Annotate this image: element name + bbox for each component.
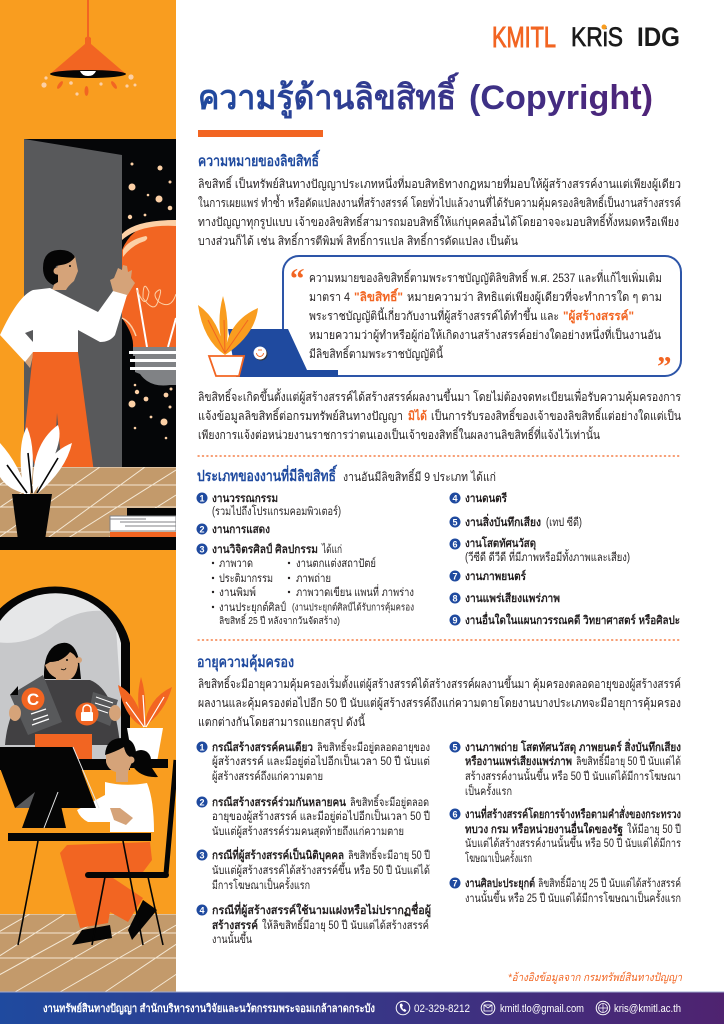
list: protection terms, left column: งานนั้นขึ้น — [212, 931, 252, 946]
icon: hanging lamp — [41, 0, 136, 96]
list: protection terms, left column: ผู้สร้างสรรค์ และมีอยู่ต่อไปอีกเป็นเวลา 50 ปี นับแต่ — [212, 753, 430, 768]
list: types of copyrighted work, left column: งานพิมพ์ — [219, 585, 256, 599]
panel: left illustration column — [0, 0, 190, 992]
list: protection terms, left column: กรณีที่ผู้สร้างสรรค์เป็นนิติบุคคล — [212, 846, 344, 863]
heading: meaning of copyright: ความหมายของลิขสิทธิ์ — [198, 149, 321, 170]
document with lock badge — [76, 692, 121, 726]
list: types of copyrighted work, right column: งานโสตทัศนวัสดุ — [465, 535, 536, 551]
quote text: "ผู้สร้างสรรค์" — [563, 309, 634, 324]
quote text — [309, 269, 662, 361]
list: types of copyrighted work, right column: 7 — [452, 572, 458, 582]
list: protection terms, right column: 6 — [452, 810, 458, 820]
list: protection terms, left column: มีการโฆษณาเป็นครั้งแรก — [212, 877, 310, 892]
list: types of copyrighted work, right column: (เทป ซีดี) — [546, 516, 582, 529]
list: protection terms, left column — [196, 738, 431, 946]
list: protection terms, right column: ทบวง กรม หรือหน่วยงานอื่นใดของรัฐ — [465, 820, 624, 837]
text block: term of protection intro — [198, 675, 681, 730]
list: protection terms, right column: 7 — [452, 878, 458, 888]
monitor — [0, 747, 99, 828]
illustration: laptop and plant — [198, 296, 338, 377]
chair — [88, 760, 176, 945]
list: types of copyrighted work, left column: (รวมไปถึงโปรแกรมคอมพิวเตอร์) — [212, 504, 341, 518]
list: types of copyrighted work, right column: 8 — [452, 594, 458, 604]
list: protection terms, left column: ลิขสิทธิ์จะมีอยู่ตลอดอายุของ — [317, 738, 430, 754]
logos: IDG — [637, 22, 680, 52]
quote text: ความหมายของลิขสิทธิ์ตามพระราชบัญญัติลิขสิทธิ์ พ.ศ. 2537 และที่แก้ไขเพิ่มเติม — [309, 269, 662, 285]
list: types of copyrighted work, left column: งานการแสดง — [212, 524, 270, 536]
list: protection terms, right column: งานศิลปะประยุกต์ — [465, 876, 535, 891]
list: types of copyrighted work, left column: 1 — [199, 494, 205, 504]
heading: types of work: งานอันมีลิขสิทธิ์มี 9 ประเภท ได้แก่ — [343, 468, 496, 484]
list: protection terms, right column — [450, 738, 681, 905]
list: types of copyrighted work, left column: ประติมากรรม — [219, 572, 273, 585]
list: types of copyrighted work, left column: 3 — [199, 544, 205, 554]
text block: registration note: เพียงการแจ้งต่อหน่วยงานราชการว่าตนเองเป็นเจ้าของสิทธิ์ในผลงานลิขสิทธิ์ที่แจ้งไว้เท่านั้น — [198, 426, 600, 442]
seated woman — [60, 738, 158, 945]
footer bar: kris@kmitl.ac.th — [614, 1003, 681, 1015]
quote text: หมายความว่า สิทธิแต่เพียงผู้เดียวที่จะทำการใด ๆ ตาม — [407, 288, 662, 305]
desk — [8, 833, 151, 945]
list: protection terms, left column: นับแต่ผู้สร้างสรรค์ร่วมคนสุดท้ายถึงแก่ความตาย — [212, 824, 404, 838]
text block: definition — [198, 175, 681, 248]
document with copyright badge: C — [27, 690, 39, 709]
logos: KRiS — [571, 22, 623, 52]
list: protection terms, left column: ให้ลิขสิทธิ์มีอายุ 50 ปี นับแต่ได้สร้างสรรค์ — [262, 916, 429, 932]
panel: legal definition quote box — [283, 256, 681, 383]
list: protection terms, left column: นับแต่ผู้สร้างสรรค์ได้สร้างสรรค์ขึ้น หรือ 50 ปี นับแต่ได้ — [212, 862, 430, 877]
list: types of copyrighted work, right column: 9 — [452, 616, 458, 626]
list: protection terms, left column: กรณีสร้างสรรค์ร่วมกันหลายคน — [212, 795, 346, 809]
white plant — [0, 425, 72, 494]
list: types of copyrighted work, left column: ภาพถ่าย — [296, 573, 331, 585]
list: protection terms, left column: 1 — [199, 742, 205, 752]
illustration: arch window with woman holding documents — [0, 587, 130, 770]
man — [0, 250, 135, 467]
illustration: floor with books and white plant — [0, 425, 176, 550]
list: protection terms, right column: หรืองานแพร่เสียงแพร่ภาพ — [465, 755, 572, 768]
text block: definition: บางส่วนก็ได้ เช่น สิทธิ์การตีพิมพ์ สิทธิ์การแปล สิทธิ์การดัดแปลง เป็นต้น — [198, 232, 518, 248]
list: types of copyrighted work, right column: งานอื่นใดในแผนกวรรณคดี วิทยาศาสตร์ หรือศิลปะ — [465, 611, 680, 627]
list: types of copyrighted work, left column: งานวิจิตรศิลป์ ศิลปกรรม — [212, 542, 318, 556]
list: types of copyrighted work, left column: ได้แก่ — [321, 543, 342, 556]
quote text: มาตรา 4 — [309, 290, 350, 304]
footnote: *อ้างอิงข้อมูลจาก กรมทรัพย์สินทางปัญญา — [508, 971, 683, 984]
quote text: มีลิขสิทธิ์ตามพระราชบัญญัตินี้ — [309, 345, 443, 361]
heading: types of work — [197, 464, 496, 485]
list: types of copyrighted work, left column: ภาพวาดเขียน แพนที่ ภาพร่าง — [296, 584, 414, 599]
heading: term of protection: อายุความคุ้มครอง — [197, 654, 294, 672]
text block: registration note: เป็นการรับรองสิทธิ์ของเจ้าของลิขสิทธิ์แต่อย่างใดแต่เป็น — [431, 407, 681, 423]
list: types of copyrighted work, right column: (วีซีดี ดีวีดี ที่มีภาพหรือมีทั้งภาพและเสียง) — [465, 549, 630, 564]
list: types of copyrighted work, left column: งานตกแต่งสถาปัตย์ — [296, 556, 376, 570]
list: types of copyrighted work, right column: 4 — [452, 494, 458, 504]
list: types of copyrighted work, left column: ลิขสิทธิ์ 25 ปี หลังจากวันจัดสร้าง) — [219, 613, 340, 627]
title underline bar — [198, 130, 323, 137]
text block: registration note: แจ้งข้อมูลลิขสิทธิ์ต่อกรมทรัพย์สินทางปัญญา — [198, 407, 403, 424]
text block: registration note: มิได้ — [408, 408, 427, 423]
shelf — [78, 759, 168, 768]
icon: opening quote: “ — [290, 263, 304, 295]
list: protection terms, left column: สร้างสรรค์ — [212, 918, 258, 932]
icon: phone — [396, 1001, 410, 1015]
list: protection terms, left column: 3 — [199, 850, 205, 860]
footer bar: 02-329-8212 — [414, 1003, 470, 1015]
list: types of copyrighted work, right column — [450, 492, 680, 627]
list: protection terms, right column: ให้มีอายุ 50 ปี — [627, 823, 681, 836]
list: types of copyrighted work, left column: งานประยุกต์ศิลป์ — [219, 600, 286, 614]
list: protection terms, left column: กรณีสร้างสรรค์คนเดียว — [212, 740, 313, 754]
quote text: พระราชบัญญัตินี้เกี่ยวกับงานที่ผู้สร้างสรรค์ได้ทำขึ้น และ — [309, 307, 559, 324]
icon: closing quote: ” — [657, 351, 672, 383]
list: types of copyrighted work, right column: งานดนตรี — [465, 492, 508, 505]
list: protection terms, left column: ลิขสิทธิ์จะมีอายุ 50 ปี — [348, 846, 430, 862]
list: protection terms, left column: ลิขสิทธิ์จะมีอยู่ตลอด — [350, 793, 429, 809]
list: protection terms, right column: 5 — [452, 742, 458, 752]
list: types of copyrighted work, right column: 6 — [452, 540, 458, 550]
quote text: "ลิขสิทธิ์" — [354, 288, 403, 304]
list: types of copyrighted work, right column: งานสิ่งบันทึกเสียง — [465, 513, 541, 529]
door — [24, 139, 122, 467]
list: protection terms, left column: อายุของผู้สร้างสรรค์ และมีอยู่ต่อไปอีกเป็นเวลา 50 ปี — [212, 808, 430, 823]
list: protection terms, right column: เป็นครั้งแรก — [465, 783, 512, 798]
illustration: orange plant — [118, 677, 172, 762]
title: ความรู้ด้านลิขสิทธิ์ — [198, 72, 460, 119]
icon: web globe — [596, 1001, 610, 1015]
list: types of copyrighted work, right column: งานแพร่เสียงแพร่ภาพ — [465, 592, 560, 605]
footer bar: งานทรัพย์สินทางปัญญา สำนักบริหารงานวิจัยและนวัตกรรมพระจอมเกล้าลาดกระบัง — [43, 1002, 375, 1015]
quote text: หมายความว่าผู้ทำหรือผู้ก่อให้เกิดงานสร้างสรรค์อย่างใดอย่างหนึ่งที่เป็นงานอัน — [309, 326, 661, 343]
list: protection terms, right column: ลิขสิทธิ์มีอายุ 25 ปี นับแต่ได้สร้างสรรค์ — [538, 874, 681, 890]
list: protection terms, right column: โฆษณาเป็นครั้งแรก — [465, 850, 532, 865]
logos — [492, 22, 680, 54]
woman with documents — [5, 643, 121, 764]
text block: registration note — [198, 388, 681, 442]
logos: KMITL — [492, 22, 556, 54]
list: types of copyrighted work, left column — [196, 492, 414, 627]
footer bar — [0, 992, 724, 1024]
list: types of copyrighted work, left column: (งานประยุกต์ศิลป์ได้รับการคุ้มครอง — [292, 602, 414, 614]
list: protection terms, right column: งานภาพถ่าย โสตทัศนวัสดุ ภาพยนตร์ สิ่งบันทึกเสียง — [465, 738, 681, 755]
list: protection terms, left column: กรณีที่ผู้สร้างสรรค์ใช้นามแฝงหรือไม่ปรากฏชื่อผู้ — [212, 901, 431, 918]
title — [198, 72, 653, 119]
list: types of copyrighted work, right column: 5 — [452, 518, 458, 528]
list: types of copyrighted work, left column: 2 — [199, 524, 205, 534]
illustration: floor and desk scene — [0, 738, 190, 992]
title: (Copyright) — [469, 79, 653, 117]
list: types of copyrighted work, left column: ภาพวาด — [219, 558, 253, 570]
list: protection terms, left column: ผู้สร้างสรรค์ถึงแก่ความตาย — [212, 769, 323, 783]
list: types of copyrighted work, right column: งานภาพยนตร์ — [465, 569, 527, 583]
footer bar: kmitl.tlo@gmail.com — [500, 1003, 584, 1015]
light bulb — [122, 220, 176, 347]
text block: term of protection intro: แตกต่างกันโดยสามารถแยกสรุป ดังนี้ — [198, 713, 365, 730]
list: protection terms, left column: 2 — [199, 798, 205, 808]
illustration: doorway with man and light bulb — [0, 139, 176, 502]
list: protection terms, left column: 4 — [199, 906, 205, 916]
icon: email — [481, 1001, 495, 1015]
list: types of copyrighted work, left column: งานวรรณกรรม — [212, 493, 278, 505]
list: protection terms, right column: ลิขสิทธิ์มีอายุ 50 ปี นับแต่ได้ — [576, 752, 681, 768]
heading: types of work: ประเภทของงานที่มีลิขสิทธิ์ — [197, 464, 338, 485]
